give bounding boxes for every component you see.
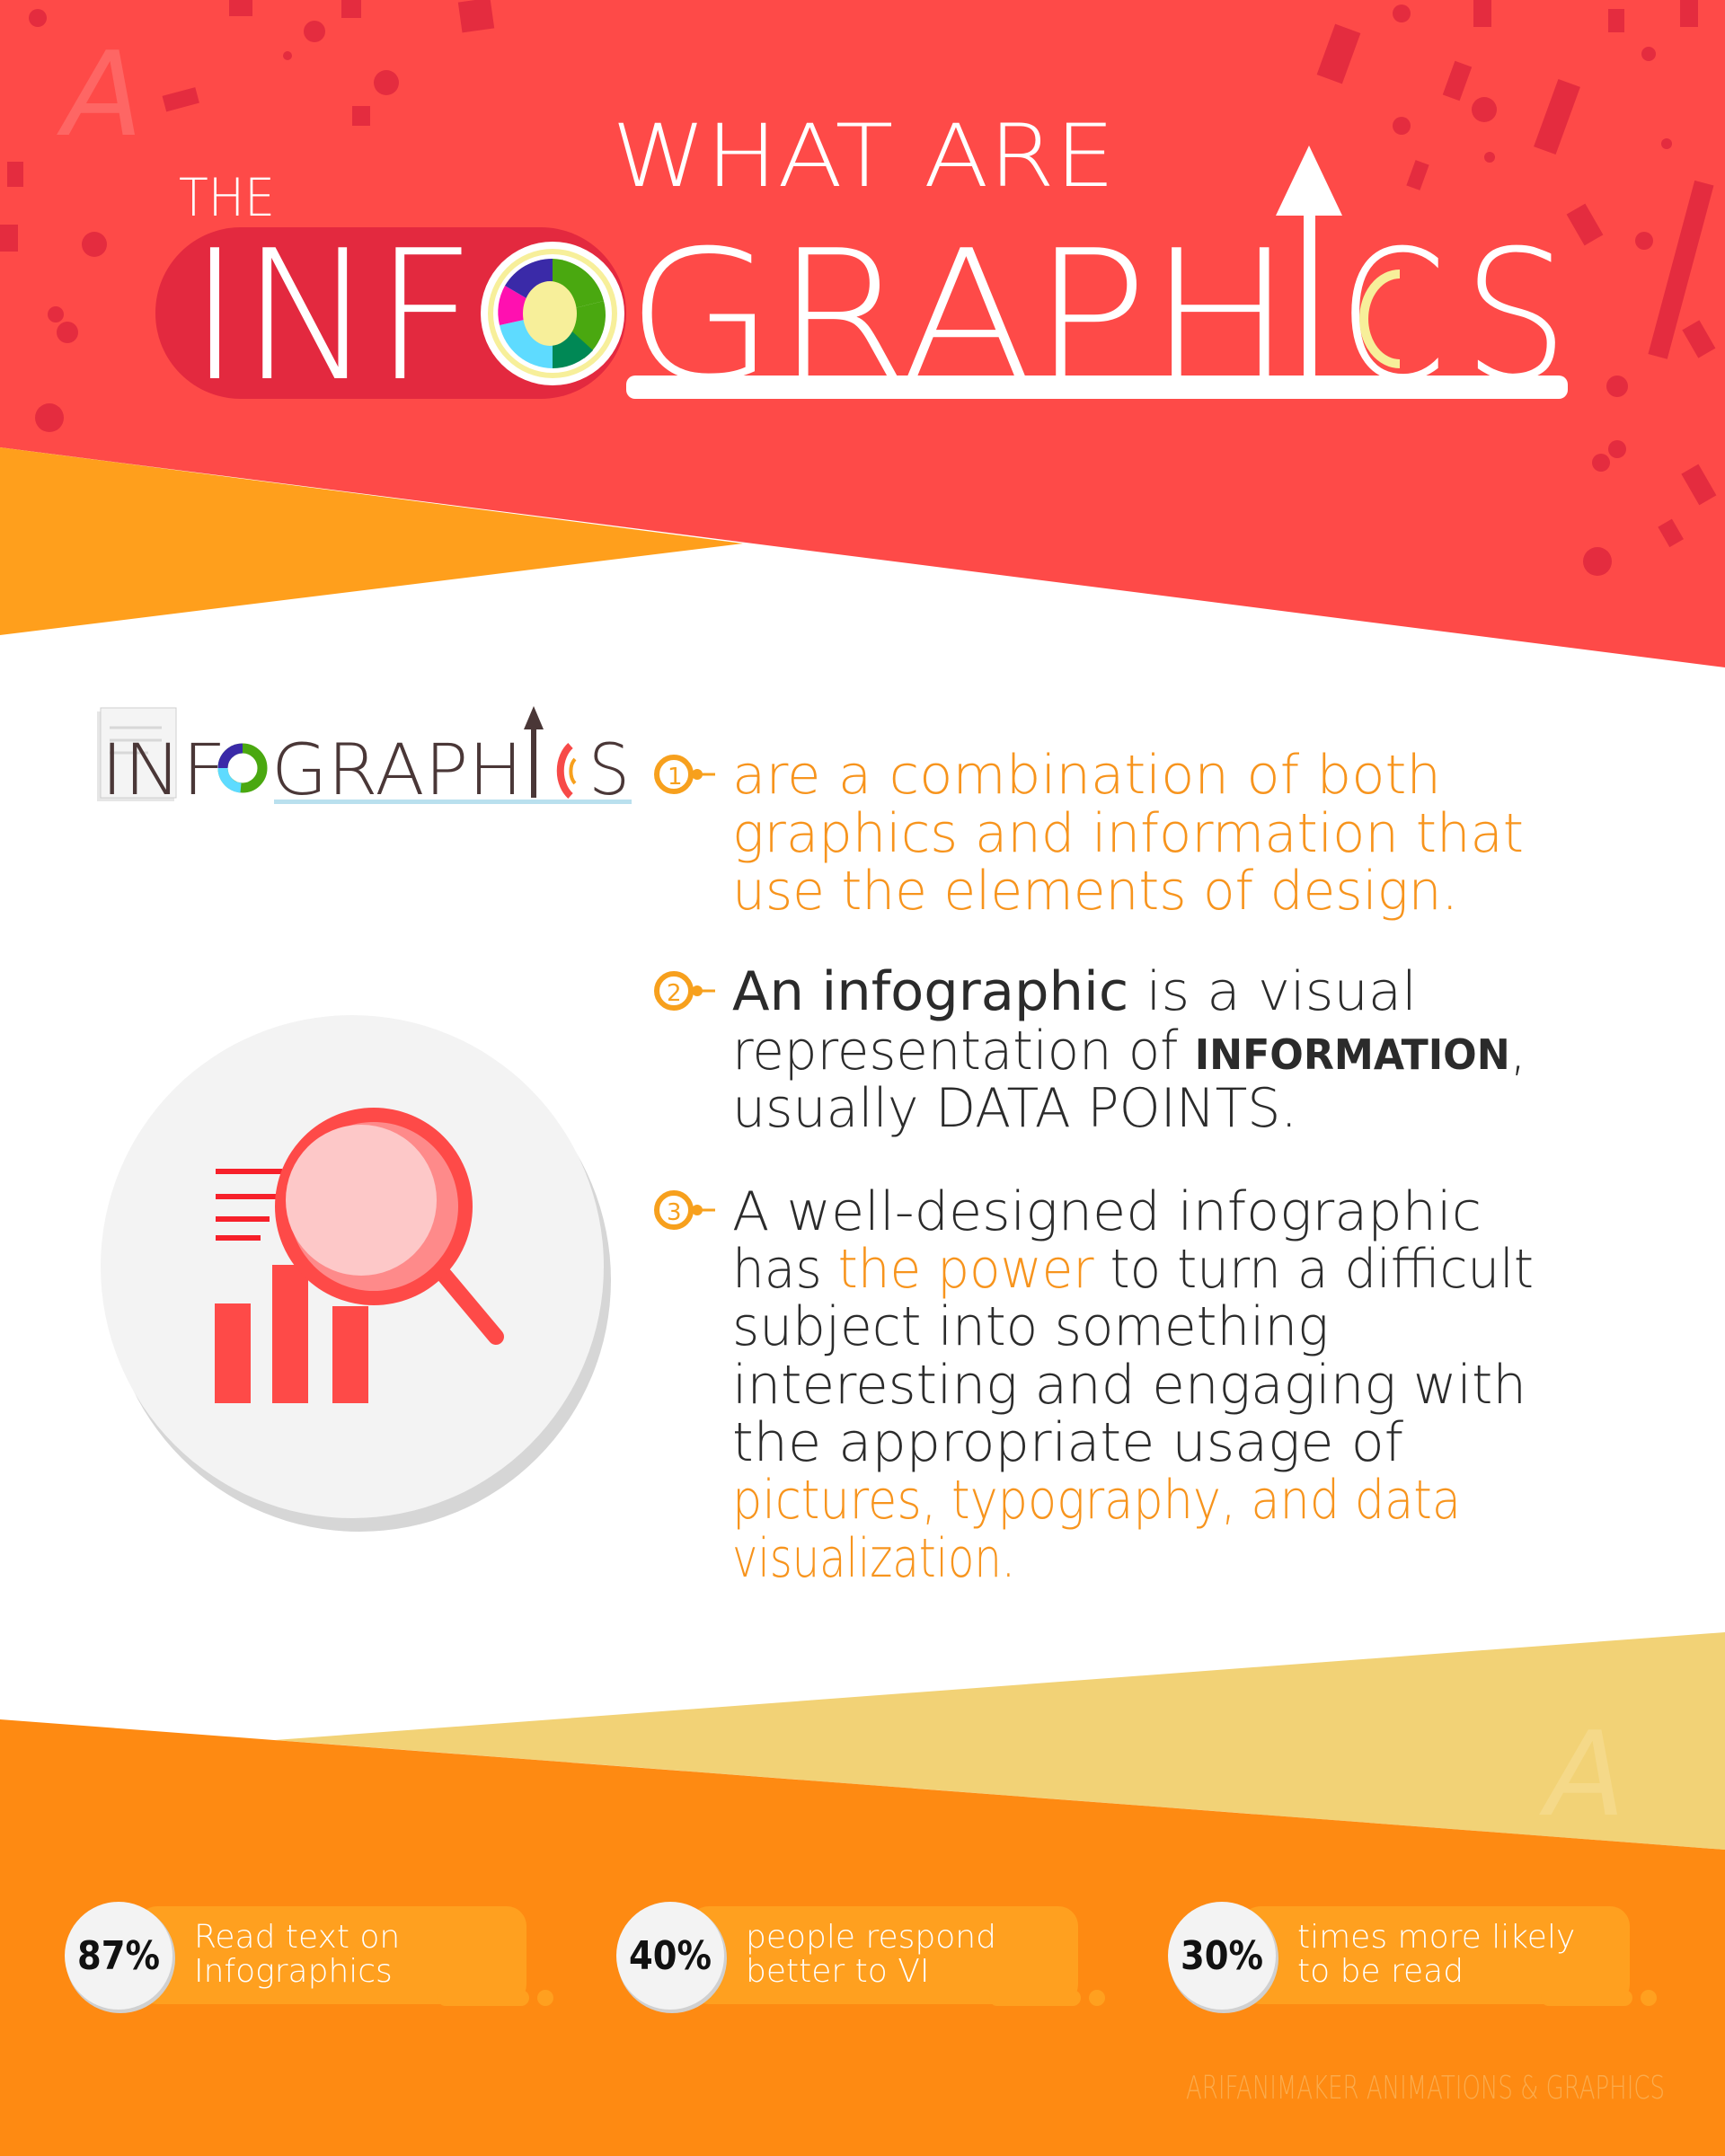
stat 3: to be read xyxy=(1297,1953,1464,1990)
stat 2 xyxy=(616,1902,1105,2013)
item 1 text: use the elements of design. xyxy=(732,860,1458,923)
marker 2: 2 xyxy=(667,980,682,1007)
GRAPH: GRAPH xyxy=(626,212,1293,421)
item 2 text xyxy=(732,960,1526,1140)
stat 3: times more likely xyxy=(1297,1919,1575,1956)
small logo INFOGRAPHICS: S xyxy=(588,730,630,811)
item 2 text: usually DATA POINTS. xyxy=(732,1077,1297,1140)
header red band xyxy=(0,0,1725,667)
O color wheel xyxy=(481,242,624,385)
stat 3: 30% xyxy=(1181,1933,1263,1979)
stat 1: Read text on xyxy=(194,1919,400,1956)
stat 2: people respond xyxy=(746,1919,996,1956)
item 3 text: pictures, typography, and data xyxy=(732,1469,1461,1532)
item 1 text xyxy=(732,744,1524,923)
marker 2 xyxy=(657,974,715,1008)
stat 1: 87% xyxy=(77,1933,160,1979)
underline bar xyxy=(626,376,1568,399)
stat 2: 40% xyxy=(629,1933,712,1979)
watermark top: A xyxy=(57,26,143,163)
marker 1: 1 xyxy=(668,764,683,791)
marker 1 xyxy=(657,757,715,791)
item 3 text: subject into something xyxy=(732,1295,1329,1358)
pill behind INFO xyxy=(155,227,626,399)
arrow I xyxy=(1276,146,1342,382)
stat 3 xyxy=(1168,1902,1657,2013)
title xyxy=(155,106,1569,421)
bottom band: A xyxy=(1539,1706,1625,1842)
icon: document xyxy=(97,711,174,801)
small logo INFOGRAPHICS: INF xyxy=(101,730,226,811)
stat 1: Infographics xyxy=(194,1953,393,1990)
item 3 text: the appropriate usage of xyxy=(732,1411,1403,1474)
marker 3: 3 xyxy=(667,1199,682,1226)
C with yellow arc: C xyxy=(1339,212,1446,421)
item 2 text: representation of INFORMATION, xyxy=(732,1020,1526,1082)
confetti xyxy=(0,0,1716,576)
stat 2: better to VI xyxy=(746,1953,929,1990)
marker 3 xyxy=(657,1193,715,1227)
INF: INF xyxy=(189,212,476,421)
small logo INFOGRAPHICS xyxy=(97,706,632,811)
S: S xyxy=(1463,212,1569,421)
title: WHAT ARE: WHAT ARE xyxy=(612,106,1115,207)
title: THE: THE xyxy=(179,167,275,228)
item 3 text xyxy=(732,1180,1534,1590)
bottom band xyxy=(0,1632,1725,2156)
stat 1 xyxy=(65,1902,553,2013)
item 3 text: interesting and engaging with xyxy=(732,1354,1526,1417)
item 3 text: has the power to turn a difficult xyxy=(732,1238,1534,1301)
icon: magnifier circle xyxy=(101,1015,611,1532)
item 1 text: are a combination of both xyxy=(732,744,1441,807)
item 2 text: An infographic is a visual xyxy=(732,960,1417,1023)
item 3 text: A well-designed infographic xyxy=(732,1180,1482,1243)
item 3 text: visualization. xyxy=(732,1527,1015,1590)
small logo INFOGRAPHICS: GRAPH xyxy=(271,730,523,811)
text block xyxy=(657,744,1534,1590)
item 1 text: graphics and information that xyxy=(732,802,1524,865)
orange triangle xyxy=(0,447,743,635)
